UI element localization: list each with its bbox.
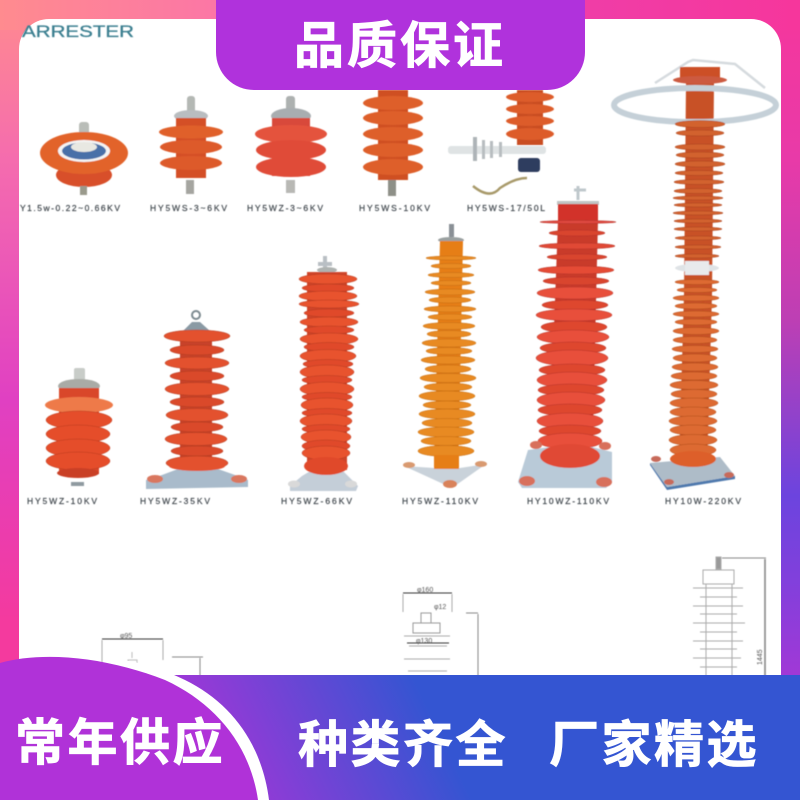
arrester: HY5WZ-110KV: HY5WZ-110KV <box>402 496 478 506</box>
dimension drawing: left <box>102 633 203 680</box>
arrester: HY5WZ-10KV: HY5WZ-10KV <box>27 496 97 506</box>
feature: 种类齐全: 种类齐全 <box>298 717 508 773</box>
arrester: HY10W-220KV with grading ring: HY10W-220KV <box>665 496 741 506</box>
dimension drawing: right: 1445 <box>757 649 764 665</box>
logo text: ARRESTER: ARRESTER <box>22 22 134 41</box>
dimension drawing: left: φ95 <box>120 633 132 640</box>
arrester: HY5WS-3~6KV <box>150 96 227 213</box>
bottom gradient bar <box>0 675 800 800</box>
arrester: HY5WS-17/50L: HY5WS-17/50L <box>467 203 545 213</box>
arrester: HY5WS-17/50L <box>448 90 554 213</box>
dimension drawing: centre <box>403 587 478 680</box>
arrester: HY5WZ-35KV: HY5WZ-35KV <box>140 496 210 506</box>
dimension drawing: centre: φ130 <box>416 638 432 645</box>
arrester: HY10W-220KV with grading ring <box>614 60 776 506</box>
arrester: HY5WS-10KV: HY5WS-10KV <box>359 203 430 213</box>
arrester: Y1.5w-0.22~0.66KV: Y1.5w-0.22~0.66KV <box>20 203 120 213</box>
arrester: HY5WZ-110KV <box>402 224 487 506</box>
arrester: HY5WZ-3~6KV: HY5WZ-3~6KV <box>247 203 323 213</box>
arrester: HY5WZ-35KV <box>140 311 248 506</box>
dimension drawing: centre: φ12 <box>434 604 446 611</box>
white crescent edge <box>105 658 269 800</box>
arrester: HY5WS-10KV <box>359 90 430 213</box>
arrester: HY5WZ-66KV: HY5WZ-66KV <box>281 496 352 506</box>
dimension drawing: centre: φ160 <box>417 587 433 594</box>
arrester: HY5WZ-10KV <box>27 368 113 506</box>
arrester: HY5WS-3~6KV: HY5WS-3~6KV <box>150 203 227 213</box>
purple corner panel <box>0 657 258 800</box>
arrester: HY10WZ-110KV <box>518 186 616 506</box>
title tab background <box>216 0 585 90</box>
arrester: HY10WZ-110KV: HY10WZ-110KV <box>527 496 609 506</box>
product photo sheet <box>20 22 776 680</box>
dimension drawing: right <box>693 557 766 680</box>
arrester: HY5WZ-3~6KV <box>247 96 327 213</box>
arrester: HY5WZ-66KV <box>281 256 359 506</box>
feature: 厂家精选: 厂家精选 <box>549 717 759 773</box>
arrester: Y1.5w-0.22~0.66KV <box>20 122 128 213</box>
title: 品质保证: 品质保证 <box>294 18 506 74</box>
feature: 常年供应: 常年供应 <box>15 715 225 771</box>
